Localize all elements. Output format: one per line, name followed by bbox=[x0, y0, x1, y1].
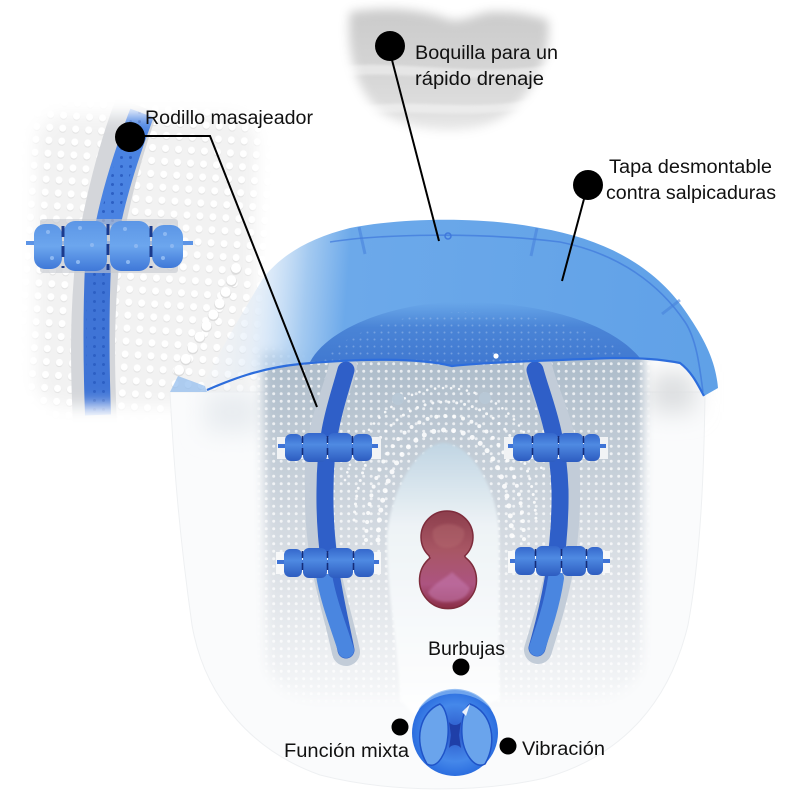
splash lid bbox=[170, 220, 718, 396]
label: vibration: Vibración bbox=[522, 739, 605, 760]
label: removable lid callout: contra salpicaduras bbox=[606, 183, 776, 204]
right foot track bbox=[535, 366, 566, 650]
inset: massage roller close-up bbox=[32, 108, 260, 416]
red massage stone bbox=[420, 511, 476, 609]
label: mixed function bbox=[284, 718, 409, 762]
left foot track bbox=[319, 366, 346, 652]
label: drain nozzle callout: Boquilla para un bbox=[415, 43, 558, 64]
lid shell bbox=[200, 220, 718, 396]
inset: drain nozzle close-up bbox=[344, 4, 553, 132]
label: vibration bbox=[500, 738, 605, 760]
track groove bbox=[93, 105, 137, 425]
label: bubbles bbox=[428, 639, 505, 676]
lid rim line bbox=[330, 235, 703, 392]
label: roller callout: Rodillo masajeador bbox=[145, 108, 314, 129]
control knob bbox=[412, 689, 498, 776]
label: drain nozzle callout: rápido drenaje bbox=[415, 69, 544, 90]
roller: left top bbox=[277, 433, 381, 462]
rollers bbox=[276, 433, 610, 578]
lid corner tip bbox=[170, 376, 207, 392]
label: bubbles: Burbujas bbox=[428, 639, 505, 660]
label: removable lid callout: Tapa desmontable bbox=[609, 157, 772, 178]
shadow under lid bbox=[205, 372, 695, 432]
roller: left bottom bbox=[276, 548, 381, 578]
center island bbox=[387, 443, 500, 720]
roller: right top bbox=[504, 433, 608, 462]
label: drain nozzle callout bbox=[375, 31, 558, 241]
blue track bbox=[108, 113, 142, 225]
concentric dots bbox=[345, 388, 545, 540]
large dot arc bbox=[176, 268, 236, 376]
foot well floor bbox=[256, 350, 650, 680]
label: removable lid callout bbox=[562, 157, 776, 281]
roller: right bottom bbox=[508, 546, 610, 576]
label: mixed function: Función mixta bbox=[284, 741, 409, 762]
inset roller bbox=[26, 219, 193, 273]
lid inner band bbox=[310, 302, 640, 366]
label: roller callout bbox=[115, 108, 317, 407]
basin body bbox=[170, 392, 705, 789]
